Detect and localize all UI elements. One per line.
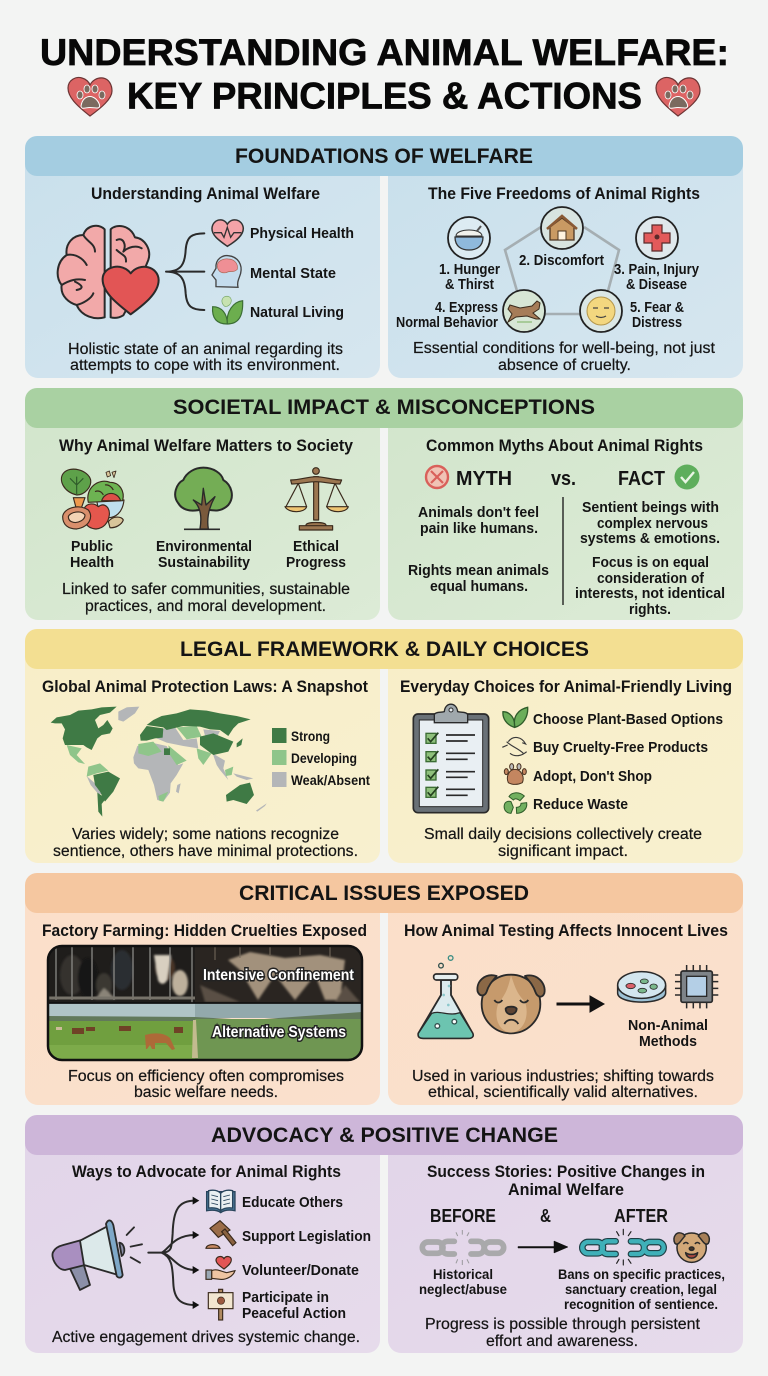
label: peaceful action [242, 1289, 346, 1322]
text: after caption [558, 1266, 725, 1312]
labels: five freedoms: 5. Fear & [630, 299, 684, 316]
text: choices description: Small daily decisions collectively create [424, 826, 702, 843]
text: testing description: Used in various industries; shifting towards [412, 1068, 714, 1085]
labels: five freedoms: Normal Behavior [396, 314, 498, 331]
text: testing description [412, 1068, 714, 1101]
heading: success stories [427, 1163, 705, 1199]
icon: gavel [206, 1221, 236, 1248]
text: laws description: sentience, others have minimal protections. [53, 843, 358, 860]
arrows: advocacy branches [148, 1197, 199, 1309]
heading: global laws: Global Animal Protection Laws: A Snapshot [42, 678, 368, 696]
diagram: pentagon connector [505, 227, 619, 314]
legend: law strength: Strong [291, 728, 330, 744]
label: ethical progress [286, 538, 346, 571]
arrow: before to after [518, 1241, 568, 1253]
icon: megaphone [52, 1220, 142, 1290]
heading: success stories: Success Stories: Positive Changes in [427, 1163, 705, 1181]
text: before caption: neglect/abuse [419, 1281, 507, 1297]
section header: advocacy: ADVOCACY & POSITIVE CHANGE [211, 1124, 558, 1147]
label: adopt: Adopt, Don't Shop [533, 768, 652, 785]
text: five freedoms description [413, 340, 716, 374]
label: public health [70, 538, 114, 571]
labels: five freedoms [396, 252, 700, 331]
icon: myth cross [426, 466, 448, 488]
icon: scales of justice [285, 468, 348, 530]
icon: branching brace [166, 233, 204, 310]
text: after caption: Bans on specific practices, [558, 1266, 725, 1282]
icon: happy dog [674, 1233, 709, 1262]
facts column: complex nervous [597, 515, 708, 532]
text: farming description: Focus on efficiency often compromises [68, 1068, 344, 1085]
text: five freedoms description: Essential conditions for well-being, not just [413, 340, 716, 357]
legend: law strength: Weak/Absent [291, 772, 370, 788]
section: critical issues [25, 873, 743, 1105]
panel: everyday choices [388, 643, 743, 863]
label: ethical progress: Ethical [293, 538, 339, 555]
labels: five freedoms: 4. Express [435, 299, 498, 316]
label: non-animal methods: Non-Animal [628, 1017, 708, 1034]
label: peaceful action: Participate in [242, 1289, 329, 1306]
labels: five freedoms: 1. Hunger [439, 261, 500, 278]
section: legal framework [25, 629, 743, 863]
icon: gray broken chain [422, 1230, 504, 1265]
legend: law strength [272, 728, 370, 788]
label: myth vs fact: MYTH [456, 468, 512, 490]
panel: global laws [25, 643, 380, 863]
section header: critical issues: CRITICAL ISSUES EXPOSED [239, 882, 529, 905]
section header: societal impact: SOCIETAL IMPACT & MISCONCEPTIONS [173, 396, 595, 419]
icon: head with brain [212, 256, 241, 287]
myths column: pain like humans. [420, 520, 538, 537]
icon: sprout [213, 296, 243, 324]
icon: tree [175, 468, 232, 529]
label: environmental sustainability: Environmental [156, 538, 252, 555]
label: before and after [430, 1205, 668, 1226]
icon: brain and heart [58, 226, 159, 318]
labels: five freedoms: & Thirst [445, 276, 494, 293]
label: before and after: AFTER [614, 1205, 668, 1226]
label: volunteer donate: Volunteer/Donate [242, 1262, 359, 1279]
heading: common myths: Common Myths About Animal Rights [426, 437, 703, 455]
panel: factory farming [25, 887, 380, 1105]
section header: critical issues [25, 873, 743, 913]
section: societal impact [25, 388, 743, 620]
title [40, 32, 729, 116]
label: non-animal methods [628, 1017, 708, 1050]
heading: animal testing: How Animal Testing Affects Innocent Lives [404, 922, 728, 940]
myths column: equal humans. [430, 578, 528, 595]
text: after caption: recognition of sentience. [564, 1296, 718, 1312]
icon: hand with heart [206, 1257, 235, 1279]
panel: myths vs facts [388, 402, 743, 620]
text: choices description [424, 826, 702, 860]
icon: heart with pulse [212, 220, 243, 246]
label: educate others: Educate Others [242, 1194, 343, 1211]
text: society description: Linked to safer communities, sustainable [62, 581, 350, 598]
label: before and after: BEFORE [430, 1205, 496, 1226]
text: success description: effort and awareness. [486, 1333, 638, 1350]
heading: why welfare matters: Why Animal Welfare Matters to Society [59, 437, 354, 455]
label: non-animal methods: Methods [639, 1033, 697, 1050]
panel: success stories [388, 1129, 743, 1353]
facts column: systems & emotions. [580, 530, 720, 547]
label: reduce waste: Reduce Waste [533, 796, 628, 813]
text: choices description: significant impact. [498, 843, 628, 860]
text: before caption: Historical [433, 1266, 493, 1282]
section header: foundations: FOUNDATIONS OF WELFARE [235, 145, 533, 168]
text: holistic state description [68, 341, 343, 374]
text: laws description [53, 826, 358, 860]
title: KEY PRINCIPLES & ACTIONS [127, 76, 642, 116]
panel: understanding animal welfare [25, 150, 380, 378]
text: farming description [68, 1068, 344, 1101]
icon: cruelty-free swirl [502, 737, 527, 756]
label: environmental sustainability [156, 538, 252, 571]
labels: five freedoms: 3. Pain, Injury [614, 261, 700, 278]
text: society description [62, 581, 350, 615]
facts column: Sentient beings with [582, 499, 719, 516]
label: intensive confinement: Intensive Confinement [203, 967, 354, 984]
section: foundations of welfare [25, 136, 743, 378]
label: plant-based: Choose Plant-Based Options [533, 711, 723, 728]
label: myth vs fact: FACT [618, 468, 665, 490]
icon: clipboard checklist [413, 704, 489, 813]
label: before and after: & [540, 1205, 551, 1226]
icon: paw [504, 764, 526, 784]
icon: medical cross [636, 217, 678, 259]
icon: running dog [503, 290, 545, 332]
text: success description [425, 1316, 701, 1350]
text: laws description: Varies widely; some nations recognize [72, 826, 339, 843]
icon: microchip [675, 965, 718, 1008]
text: holistic state description: Holistic state of an animal regarding its [68, 341, 343, 358]
section: advocacy [25, 1115, 743, 1353]
panel: animal testing [388, 887, 743, 1105]
label: physical health: Physical Health [250, 225, 354, 242]
icon: calm face [580, 290, 622, 332]
text: after caption: sanctuary creation, legal [565, 1281, 717, 1297]
text: testing description: ethical, scientifically valid alternatives. [428, 1084, 698, 1101]
panel: five freedoms [388, 150, 743, 378]
icon: protest sign [208, 1289, 233, 1320]
facts column: rights. [629, 601, 671, 618]
heading: success stories: Animal Welfare [508, 1181, 624, 1199]
facts column: Focus is on equal [592, 554, 709, 571]
icon: fact check [674, 464, 700, 490]
label: natural living: Natural Living [250, 304, 344, 321]
label: myth vs fact: vs. [551, 468, 576, 490]
text: society description: practices, and moral development. [85, 598, 326, 615]
title: UNDERSTANDING ANIMAL WELFARE: [40, 32, 729, 73]
label: public health: Health [70, 554, 114, 571]
section header: societal impact [25, 388, 743, 428]
icon: petri dish [618, 972, 666, 1002]
icon: teal broken chain [582, 1229, 664, 1265]
image: confinement versus pasture [48, 946, 362, 1060]
labels: five freedoms: & Disease [626, 276, 687, 293]
facts column: interests, not identical [575, 585, 725, 602]
legend: law strength: Developing [291, 750, 357, 766]
text: holistic state description: attempts to cope with its environment. [70, 357, 340, 374]
labels: five freedoms: Distress [632, 314, 682, 331]
icon: healthy food [61, 469, 124, 529]
label: public health: Public [71, 538, 113, 555]
arrow: to non-animal methods [557, 996, 604, 1012]
heading: ways to advocate: Ways to Advocate for Animal Rights [72, 1163, 341, 1181]
section header: legal framework: LEGAL FRAMEWORK & DAILY CHOICES [180, 638, 589, 661]
panel: ways to advocate [25, 1129, 380, 1353]
heading: five freedoms: The Five Freedoms of Animal Rights [428, 185, 700, 203]
label: ethical progress: Progress [286, 554, 346, 571]
text: success description: Progress is possible through persistent [425, 1316, 701, 1333]
label: alternative systems: Alternative Systems [212, 1024, 346, 1041]
label: environmental sustainability: Sustainability [158, 554, 251, 571]
icon: open book [207, 1190, 235, 1213]
label: mental state: Mental State [250, 265, 336, 282]
heading: everyday choices: Everyday Choices for Animal-Friendly Living [400, 678, 732, 696]
text: advocacy description: Active engagement drives systemic change. [52, 1329, 360, 1346]
label: support legislation: Support Legislation [242, 1228, 371, 1245]
icon: leaf [503, 707, 528, 727]
section header: foundations [25, 136, 743, 176]
myths column: Rights mean animals [408, 562, 549, 579]
icon: house [541, 207, 583, 249]
facts column [575, 499, 725, 618]
facts column: consideration of [597, 570, 705, 587]
chart: world map [51, 707, 267, 817]
label: myth vs fact [456, 468, 665, 490]
labels: five freedoms: 2. Discomfort [519, 252, 604, 269]
text: five freedoms description: absence of cruelty. [498, 357, 631, 374]
icon: sad dog [477, 975, 545, 1033]
icon: recycle [504, 793, 527, 813]
text: before caption [419, 1266, 507, 1297]
myths column [408, 504, 549, 595]
text: farming description: basic welfare needs. [134, 1084, 278, 1101]
panel: why welfare matters [25, 402, 380, 620]
heading: understanding animal welfare: Understanding Animal Welfare [91, 185, 320, 203]
icon: food bowl [448, 217, 490, 259]
myths column: Animals don't feel [418, 504, 539, 521]
icon: flask [418, 956, 473, 1038]
label: cruelty-free: Buy Cruelty-Free Products [533, 739, 708, 756]
label: peaceful action: Peaceful Action [242, 1305, 346, 1322]
heading: factory farming: Factory Farming: Hidden Cruelties Exposed [42, 922, 367, 940]
section header: legal framework [25, 629, 743, 669]
section header: advocacy [25, 1115, 743, 1155]
